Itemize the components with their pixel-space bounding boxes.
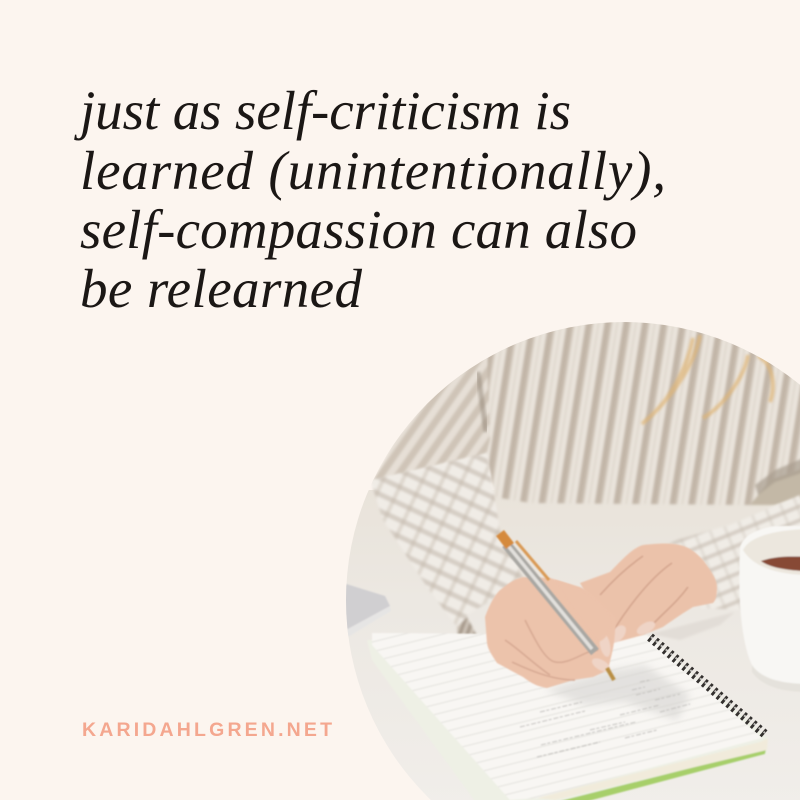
title quote <box>74 80 666 319</box>
footer website: KARIDAHLGREN.NET <box>82 719 332 741</box>
index finger over pen <box>557 580 606 642</box>
title quote: be relearned <box>80 258 362 319</box>
icon: gold and silver pen <box>500 533 614 680</box>
front hand <box>485 577 615 688</box>
spiral binding <box>650 637 766 735</box>
table shadow right of hand <box>656 614 730 640</box>
title quote: self-compassion can also <box>80 199 637 260</box>
table surface <box>340 490 800 800</box>
handwriting on page <box>520 680 690 757</box>
title quote: learned (unintentionally), <box>80 140 666 201</box>
left forearm sleeve <box>370 453 523 650</box>
laptop corner <box>346 584 390 630</box>
sleeve fold shadow <box>478 372 486 432</box>
right forearm sleeve <box>665 495 800 610</box>
notebook <box>367 633 768 800</box>
icon: blonde hair strands <box>642 335 773 424</box>
coffee cup <box>739 526 800 692</box>
photo: hands writing in a notebook, circular crop <box>340 320 800 800</box>
title quote: just as self-criticism is <box>74 80 571 141</box>
back hand <box>580 544 717 646</box>
shirt upper sleeve <box>372 350 490 482</box>
shadow of hand on page <box>545 665 690 720</box>
shirt torso <box>478 320 800 505</box>
